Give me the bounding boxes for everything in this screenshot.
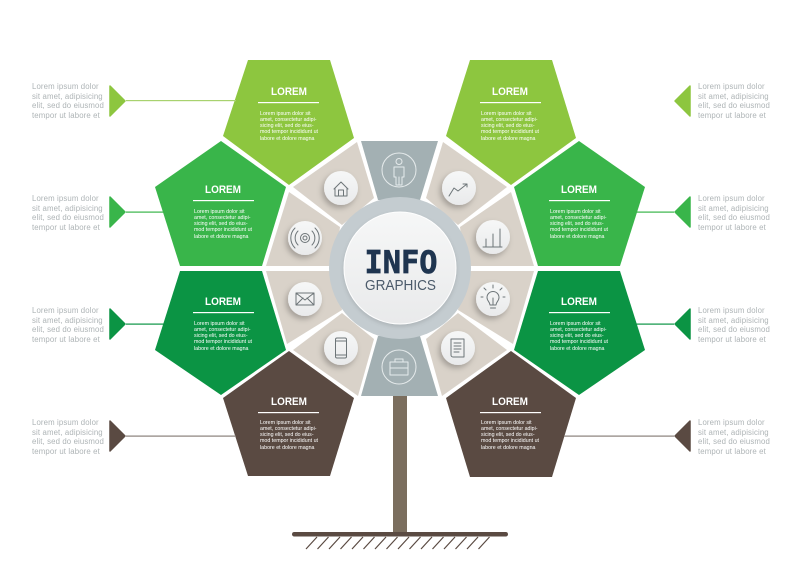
panel: lower right green leaf: amet, consectetur adipi- bbox=[550, 327, 607, 333]
right callout 2: Lorem ipsum dolor bbox=[698, 194, 765, 203]
icon: document bbox=[441, 331, 475, 365]
panel: top right leaf: Lorem ipsum dolor sit bbox=[481, 111, 532, 117]
right callout 1: Lorem ipsum dolor bbox=[698, 82, 765, 91]
right callout 1 bbox=[675, 82, 770, 120]
panel: top left leaf: sicing elit, sed do eius- bbox=[260, 123, 314, 129]
panel: upper right green leaf: sicing elit, sed do eius- bbox=[550, 221, 604, 227]
subtitle: GRAPHICS: GRAPHICS bbox=[365, 277, 436, 294]
panel: top right leaf bbox=[446, 60, 576, 185]
right callout 2: tempor ut labore et bbox=[698, 223, 767, 232]
panel: bottom right brown leaf: labore et dolore magna bbox=[481, 445, 536, 451]
right callout 2: sit amet, adipisicing bbox=[698, 204, 769, 213]
panel: upper right green leaf bbox=[514, 141, 645, 266]
ground with hatching bbox=[292, 532, 508, 549]
tree trunk bbox=[393, 396, 407, 534]
panel: bottom left brown leaf: labore et dolore magna bbox=[260, 445, 315, 451]
right callout 3: sit amet, adipisicing bbox=[698, 316, 769, 325]
right callout 4: sit amet, adipisicing bbox=[698, 428, 769, 437]
right callout 3 bbox=[636, 306, 770, 344]
panel: top left leaf: LOREM bbox=[271, 86, 307, 98]
left callout 4: Lorem ipsum dolor bbox=[32, 418, 99, 427]
icon: trend arrow bbox=[442, 171, 476, 205]
left callout 3: tempor ut labore et bbox=[32, 335, 101, 344]
left callout 1: tempor ut labore et bbox=[32, 111, 101, 120]
left callout 4: sit amet, adipisicing bbox=[32, 428, 103, 437]
icon: envelope bbox=[288, 282, 322, 316]
left callout 2 bbox=[32, 194, 164, 232]
panel: upper left green leaf: amet, consectetur adipi- bbox=[194, 215, 251, 221]
left callout 1: sit amet, adipisicing bbox=[32, 92, 103, 101]
right callout 4: tempor ut labore et bbox=[698, 447, 767, 456]
panel: lower left green leaf: labore et dolore magna bbox=[194, 346, 249, 352]
left callout 1: elit, sed do eiusmod bbox=[32, 101, 104, 110]
icon: home bbox=[324, 171, 358, 205]
left callout 2: Lorem ipsum dolor bbox=[32, 194, 99, 203]
panel: top left leaf: mod tempor incididunt ut bbox=[260, 129, 319, 135]
icon: light bulb bbox=[476, 282, 510, 316]
panel: lower right green leaf: sicing elit, sed do eius- bbox=[550, 333, 604, 339]
panel: top right leaf: mod tempor incididunt ut bbox=[481, 129, 540, 135]
right callout 4: elit, sed do eiusmod bbox=[698, 437, 770, 446]
left callout 2: sit amet, adipisicing bbox=[32, 204, 103, 213]
panel: bottom right brown leaf: LOREM bbox=[492, 396, 528, 408]
right callout 1: elit, sed do eiusmod bbox=[698, 101, 770, 110]
panel: upper right green leaf: amet, consectetur adipi- bbox=[550, 215, 607, 221]
panel: top left leaf bbox=[223, 60, 354, 185]
panel: upper right green leaf: mod tempor incididunt ut bbox=[550, 227, 609, 233]
right callout 3: Lorem ipsum dolor bbox=[698, 306, 765, 315]
right callout 1: tempor ut labore et bbox=[698, 111, 767, 120]
panel: upper left green leaf: labore et dolore magna bbox=[194, 234, 249, 240]
icon: wireless signal bbox=[288, 221, 322, 255]
panel: upper right green leaf: LOREM bbox=[561, 184, 597, 196]
panel: bottom right brown leaf: mod tempor incididunt ut bbox=[481, 438, 540, 444]
grey segment: top bbox=[361, 141, 438, 200]
panel: bottom right brown leaf: Lorem ipsum dolor sit bbox=[481, 420, 532, 426]
left callout 2: tempor ut labore et bbox=[32, 223, 101, 232]
right callout 2 bbox=[636, 194, 770, 232]
icon: briefcase bbox=[382, 350, 416, 384]
right callout 4 bbox=[564, 418, 770, 456]
panel: top right leaf: LOREM bbox=[492, 86, 528, 98]
panel: upper left green leaf: Lorem ipsum dolor sit bbox=[194, 209, 245, 215]
panel: bottom right brown leaf bbox=[446, 351, 576, 477]
panel: top left leaf: Lorem ipsum dolor sit bbox=[260, 111, 311, 117]
panel: upper left green leaf: LOREM bbox=[205, 184, 241, 196]
panel: lower left green leaf: amet, consectetur adipi- bbox=[194, 327, 251, 333]
icon: smartphone bbox=[324, 331, 358, 365]
left callout 1 bbox=[32, 82, 236, 120]
panel: top right leaf: labore et dolore magna bbox=[481, 136, 536, 142]
left callout 4 bbox=[32, 418, 236, 456]
left callout 2: elit, sed do eiusmod bbox=[32, 213, 104, 222]
left callout 4: tempor ut labore et bbox=[32, 447, 101, 456]
panel: bottom left brown leaf: sicing elit, sed do eius- bbox=[260, 432, 314, 438]
left callout 3: sit amet, adipisicing bbox=[32, 316, 103, 325]
panel: bottom left brown leaf: LOREM bbox=[271, 396, 307, 408]
panel: top right leaf: sicing elit, sed do eius- bbox=[481, 123, 535, 129]
icon: person bbox=[382, 153, 416, 187]
right callout 2: elit, sed do eiusmod bbox=[698, 213, 770, 222]
panel: upper left green leaf bbox=[155, 141, 286, 266]
panel: upper right green leaf: labore et dolore magna bbox=[550, 234, 605, 240]
panel: lower right green leaf: Lorem ipsum dolor sit bbox=[550, 321, 601, 327]
right callout 4: Lorem ipsum dolor bbox=[698, 418, 765, 427]
left callout 3: elit, sed do eiusmod bbox=[32, 325, 104, 334]
grey segment: bottom bbox=[361, 336, 438, 396]
right callout 1: sit amet, adipisicing bbox=[698, 92, 769, 101]
panel: lower left green leaf bbox=[155, 271, 286, 395]
panel: lower right green leaf: labore et dolore magna bbox=[550, 346, 605, 352]
panel: bottom left brown leaf: amet, consectetur adipi- bbox=[260, 426, 317, 432]
panel: lower left green leaf: mod tempor incididunt ut bbox=[194, 339, 253, 345]
beige segments of the crown bbox=[266, 142, 534, 396]
panel: upper right green leaf: Lorem ipsum dolor sit bbox=[550, 209, 601, 215]
panel: bottom left brown leaf: mod tempor incididunt ut bbox=[260, 438, 319, 444]
panel: bottom left brown leaf bbox=[223, 351, 354, 476]
panel: top left leaf: labore et dolore magna bbox=[260, 136, 315, 142]
left callout 4: elit, sed do eiusmod bbox=[32, 437, 104, 446]
panel: lower right green leaf bbox=[514, 271, 645, 395]
panel: bottom right brown leaf: sicing elit, sed do eius- bbox=[481, 432, 535, 438]
right callout 3: elit, sed do eiusmod bbox=[698, 325, 770, 334]
panel: bottom left brown leaf: Lorem ipsum dolor sit bbox=[260, 420, 311, 426]
panel: upper left green leaf: sicing elit, sed do eius- bbox=[194, 221, 248, 227]
panel: bottom right brown leaf: amet, consectetur adipi- bbox=[481, 426, 538, 432]
panel: upper left green leaf: mod tempor incididunt ut bbox=[194, 227, 253, 233]
panel: lower right green leaf: mod tempor incididunt ut bbox=[550, 339, 609, 345]
central hub bbox=[329, 197, 471, 339]
left callout 1: Lorem ipsum dolor bbox=[32, 82, 99, 91]
panel: lower left green leaf: Lorem ipsum dolor sit bbox=[194, 321, 245, 327]
right callout 3: tempor ut labore et bbox=[698, 335, 767, 344]
panel: top right leaf: amet, consectetur adipi- bbox=[481, 117, 538, 123]
left callout 3 bbox=[32, 306, 164, 344]
title: INFO: INFO bbox=[364, 245, 438, 281]
panel: lower left green leaf: LOREM bbox=[205, 296, 241, 308]
panel: top left leaf: amet, consectetur adipi- bbox=[260, 117, 317, 123]
icon: bar chart bbox=[476, 220, 510, 254]
panel: lower left green leaf: sicing elit, sed do eius- bbox=[194, 333, 248, 339]
panel: lower right green leaf: LOREM bbox=[561, 296, 597, 308]
left callout 3: Lorem ipsum dolor bbox=[32, 306, 99, 315]
